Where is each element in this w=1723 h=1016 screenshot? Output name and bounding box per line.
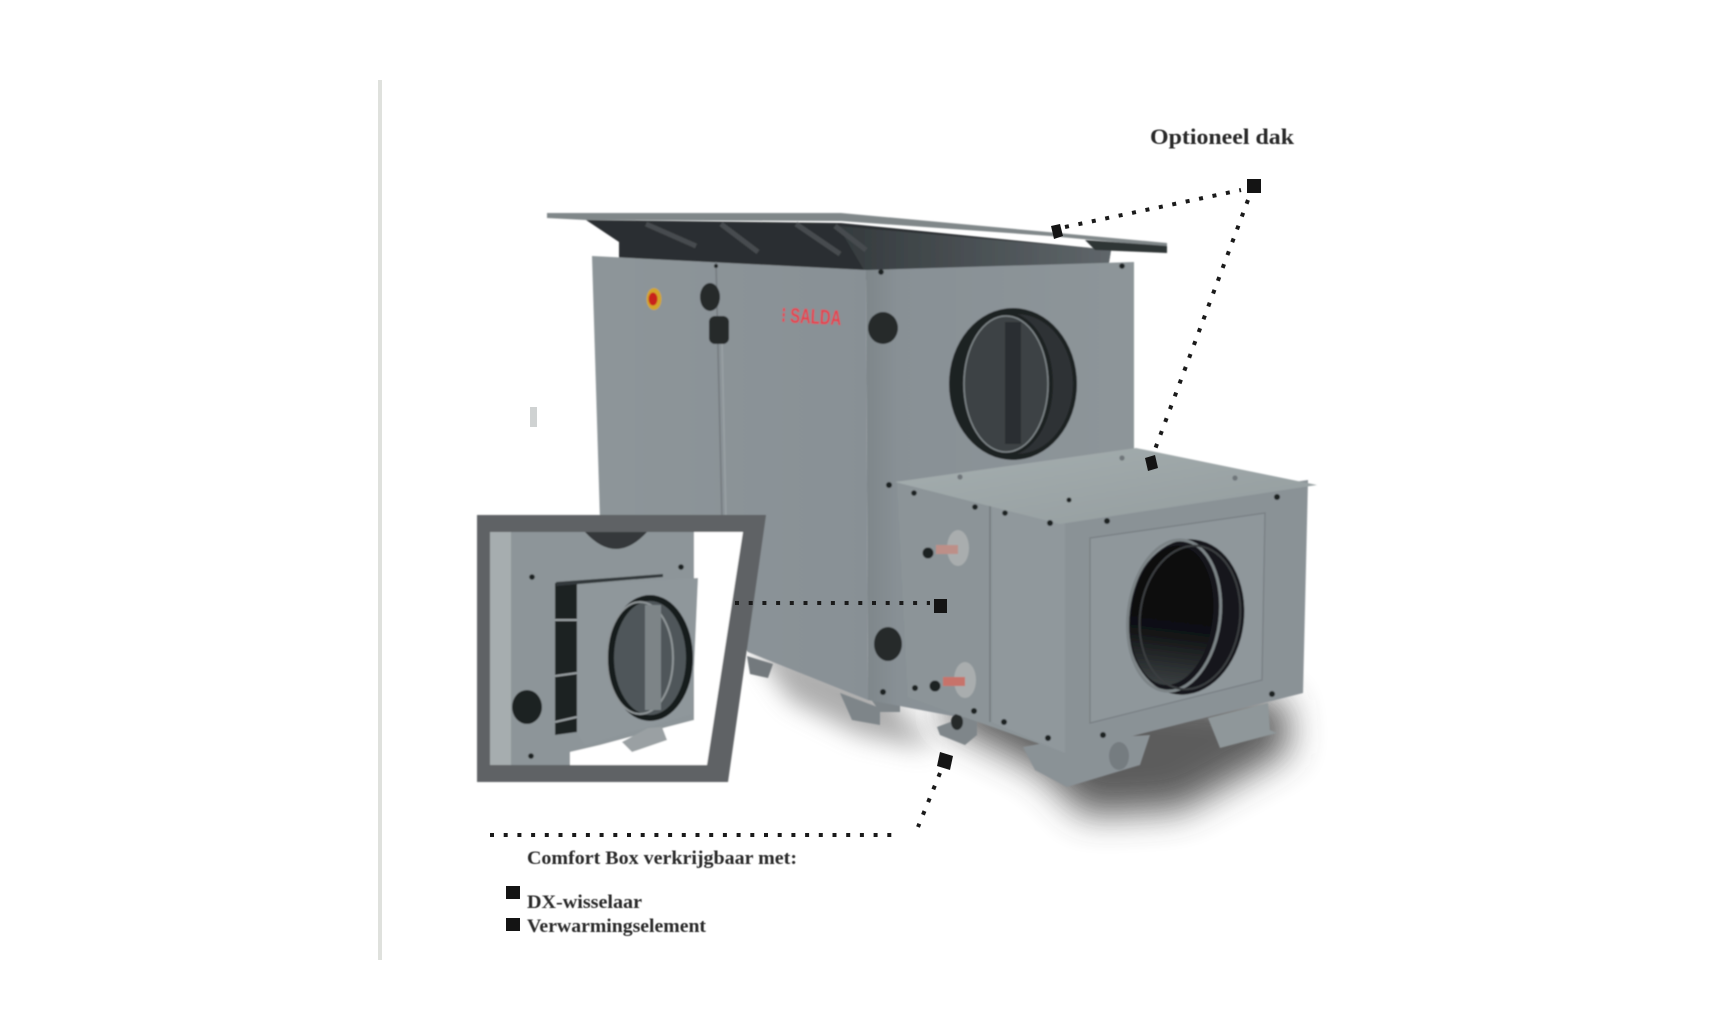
label: optional roof: Optioneel dak [1150,124,1295,149]
roof right underside [838,226,1111,280]
inset louvre [555,583,577,735]
leader: inset to comfort box [735,601,930,605]
comfort box left face [897,480,1065,753]
leader: roof to marker [1065,190,1241,227]
optional roof plate [547,213,1167,247]
emergency stop button [646,288,662,310]
small grey mark [530,407,537,427]
floor shadow [745,635,1290,815]
list item: DX exchanger: DX-wisselaar [527,892,643,913]
cabinet screws [714,263,1125,275]
comfort box top plate [895,448,1317,524]
roof underside [586,220,1111,280]
inset white interior [490,532,743,765]
roof edge dark [1085,240,1167,253]
inset duct top sliver [585,532,647,549]
cable glands [700,283,902,661]
round duct on main cabinet [949,308,1077,460]
heading: available with: Comfort Box verkrijgbaar met: [527,848,797,869]
inset panel [577,578,698,745]
inset louvre slats [555,620,577,722]
comfort box feet [937,703,1277,787]
rear feet [747,656,900,725]
leader: foot to bottom text [918,773,940,827]
brand label: ⁝ SALDA [781,304,842,330]
pipe connectors [922,530,976,698]
inset screws [528,564,684,759]
door seam [716,262,722,520]
comfort box screws [880,482,1280,741]
inset round duct [607,595,693,721]
leader: bottom horizontal [490,833,896,837]
main cabinet side face [866,262,1134,725]
marker squares [934,179,1261,770]
main cabinet front face [592,256,868,700]
vertical divider line [378,80,382,960]
comfort box recessed panel [1090,513,1265,723]
inset foot [622,727,667,752]
inset wall [490,532,694,765]
comfort box right face [1065,480,1308,753]
leader lines [490,190,1248,835]
leader: marker to comfort box lid [1154,200,1248,452]
main unit [547,213,1317,787]
inset outer frame [477,515,766,782]
inset knob [512,690,542,724]
inset top edge [556,574,663,586]
inset light strip [490,532,511,765]
bullet square 2 [506,918,520,931]
list item: heating element: Verwarmingselement [527,916,707,937]
round duct on comfort box [1119,533,1253,701]
roof support brackets [646,224,866,254]
inset detail frame [477,515,766,782]
bullet square 1 [506,886,520,899]
comfort box centre panel [992,500,1065,753]
